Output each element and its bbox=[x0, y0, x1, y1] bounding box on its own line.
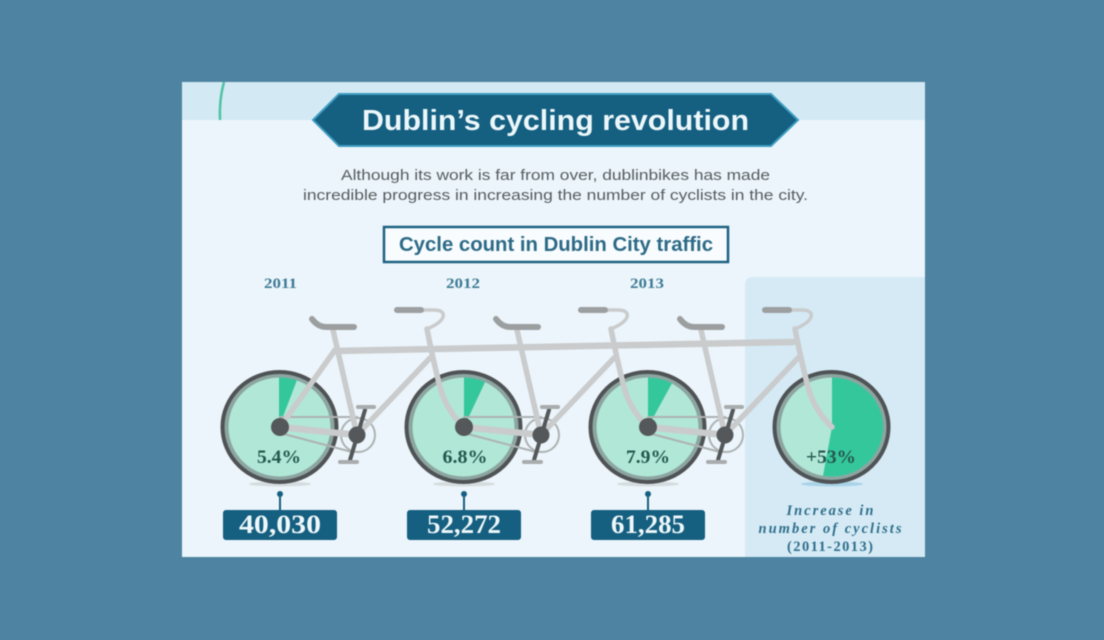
wheel 1: 2011 share 5.4% bbox=[222, 372, 336, 486]
title banner: Dublin’s cycling revolution bbox=[362, 105, 749, 137]
intro text: incredible progress in increasing the number of cyclists in the city. bbox=[303, 187, 808, 204]
bike section 2 bbox=[455, 310, 648, 462]
wheel 3: 2013 share 7.9% bbox=[590, 372, 704, 486]
chart heading bbox=[384, 227, 728, 262]
increase caption: (2011-2013) bbox=[787, 539, 873, 555]
intro text: Although its work is far from over, dublinbikes has made bbox=[341, 167, 770, 184]
wheel percentages: +53% bbox=[806, 447, 856, 468]
title banner bbox=[313, 94, 798, 146]
panel: infographic background bbox=[182, 82, 925, 557]
top tube bbox=[335, 342, 793, 351]
year labels: 2011 bbox=[264, 276, 297, 292]
count 2012: 52,272: 52,272 bbox=[427, 510, 501, 539]
intro text bbox=[303, 167, 808, 204]
increase caption: Increase in bbox=[786, 503, 874, 519]
year labels bbox=[264, 276, 664, 292]
tandem bicycle frame bbox=[271, 310, 832, 462]
chart heading: Cycle count in Dublin City traffic bbox=[399, 234, 713, 256]
panel: increase highlight column bbox=[745, 277, 925, 557]
wheel 4: increase 53% bbox=[774, 372, 888, 486]
bike section 1 bbox=[271, 310, 464, 462]
wheel percentages: 6.8% bbox=[442, 447, 488, 468]
count 2011: 40,030: 40,030 bbox=[239, 510, 321, 539]
increase caption: number of cyclists bbox=[758, 521, 902, 537]
wheel percentages: 7.9% bbox=[626, 447, 670, 468]
wheel percentages bbox=[257, 447, 856, 468]
count 2012: 52,272 bbox=[407, 491, 521, 540]
bike section 3 bbox=[639, 310, 832, 462]
count 2013: 61,285: 61,285 bbox=[611, 510, 685, 539]
year labels: 2013 bbox=[630, 276, 664, 292]
count 2011: 40,030 bbox=[223, 491, 337, 540]
count 2013: 61,285 bbox=[591, 491, 705, 540]
increase caption bbox=[758, 503, 902, 555]
wheel percentages: 5.4% bbox=[257, 447, 301, 468]
wheel 2: 2012 share 6.8% bbox=[406, 372, 520, 486]
year labels: 2012 bbox=[446, 276, 480, 292]
